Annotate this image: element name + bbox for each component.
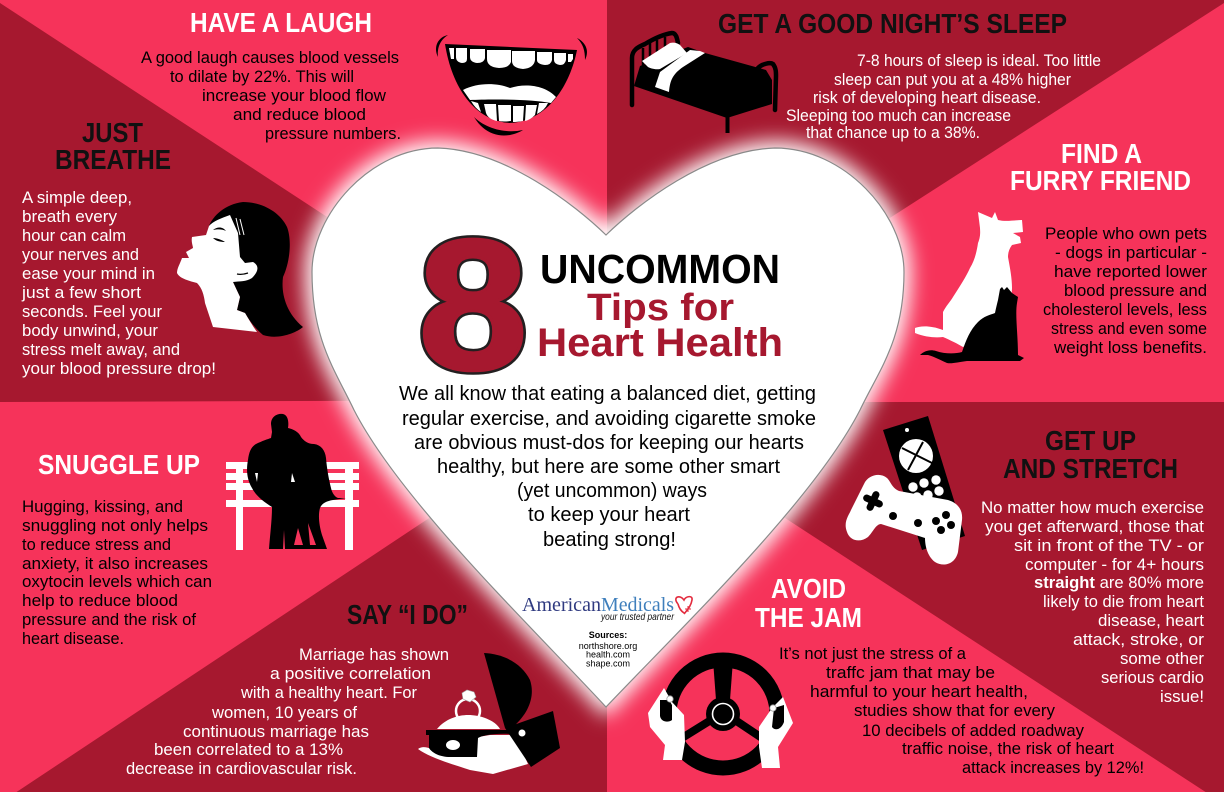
text: snuggle up: to reduce stress and [22,536,171,554]
text: avoid the jam: traffic noise, the risk of heart [902,740,1114,758]
text: snuggle up: anxiety, it also increases [22,555,208,573]
text: say i do: a positive correlation [270,665,431,683]
intro text: (yet uncommon) ways [517,480,707,502]
title [537,246,783,365]
text: sleep: risk of developing heart disease. [813,89,1041,107]
icon: steering wheel and hands [648,660,793,768]
heading: avoid the jam [755,573,862,633]
icon: remote and game controller [846,416,965,565]
intro text: regular exercise, and avoiding cigarette smoke [402,408,816,430]
text: snuggle up: pressure and the risk of [22,611,196,629]
heading: avoid the jam: AVOID [771,573,846,604]
text: just breathe [21,189,216,378]
heart glow [312,148,904,707]
text: just breathe: just a few short [21,284,141,302]
text: get up: likely to die from heart [1043,593,1204,611]
icon: laughing mouth [436,35,587,136]
text: snuggle up: snuggling not only helps [22,517,208,535]
heading: furry friend [1010,138,1191,196]
panel: good night's sleep [632,8,1101,142]
text: just breathe: your blood pressure drop! [22,360,216,378]
text: just breathe: hour can calm [22,227,126,245]
text: avoid the jam: harmful to your heart health, [810,683,1028,701]
text: furry friend: have reported lower [1054,263,1208,281]
text: sleep: Sleeping too much can increase [786,107,1011,125]
text: say i do [126,646,449,778]
text: avoid the jam: studies show that for every [854,702,1056,720]
text: say i do: decrease in cardiovascular risk. [126,760,357,778]
text: get up: disease, heart [1098,612,1204,630]
text: furry friend: stress and even some [1051,320,1207,338]
text: sleep: sleep can put you at a 48% higher [834,71,1071,89]
logo: American Medicals: Medicals [601,594,674,616]
text: snuggle up: help to reduce blood [22,592,178,610]
text: have a laugh: A good laugh causes blood vessels [141,49,399,67]
heading: just breathe [55,117,171,175]
text: say i do: continuous marriage has [183,723,369,741]
text: avoid the jam [779,645,1144,777]
text: avoid the jam: attack increases by 12%! [962,759,1144,777]
sources: Sources: [589,630,627,640]
text: have a laugh [141,49,401,143]
text: avoid the jam: It’s not just the stress of a [779,645,967,663]
text: furry friend: - dogs in particular - [1055,244,1207,262]
text: get up: serious cardio [1101,669,1204,687]
heading: avoid the jam: THE JAM [755,602,862,633]
text: furry friend: weight loss benefits. [1053,339,1207,357]
text: avoid the jam: 10 decibels of added roadway [862,722,1085,740]
heart [312,148,904,707]
big number 8: 8 [418,200,528,409]
heading: furry friend: FIND A [1061,138,1142,169]
text: just breathe: breath every [22,208,118,226]
text: snuggle up: heart disease. [22,630,124,648]
text: have a laugh: pressure numbers. [265,125,401,143]
sources [579,630,637,668]
text: say i do: with a healthy heart. For [240,684,417,702]
title: Tips for [587,287,734,329]
heading: get up: GET UP [1045,425,1136,456]
title: Heart Health [537,321,783,365]
text: just breathe: ease your mind in [22,265,155,283]
text: say i do: women, 10 years of [211,704,357,722]
sources: northshore.org [579,641,637,651]
text: just breathe: body unwind, your [22,322,159,340]
intro text: to keep your heart [528,504,690,526]
heading: say i do: SAY “I DO” [347,599,468,630]
icon: dog and cat [915,212,1024,363]
text: just breathe: seconds. Feel your [22,303,163,321]
text: get up: you get afterward, those that [985,518,1204,536]
heading: snuggle up: SNUGGLE UP [38,449,200,480]
intro text: beating strong! [543,529,676,551]
text: get up: straight are 80% more [1034,574,1204,592]
panel: have a laugh [141,7,587,143]
text: have a laugh: and reduce blood [233,106,366,124]
text: furry friend: blood pressure and [1064,282,1207,300]
text: get up: computer - for 4+ hours [1025,556,1204,574]
heading: sleep: GET A GOOD NIGHT’S SLEEP [718,8,1067,39]
heading: just breathe: BREATHE [55,144,171,175]
text: snuggle up: Hugging, kissing, and [22,498,183,516]
text: just breathe: your nerves and [22,246,139,264]
title: UNCOMMON [540,246,780,292]
icon: couple on a bench [226,414,359,550]
panel: just breathe [21,117,303,378]
intro text: healthy, but here are some other smart [437,456,780,478]
big number 8: 8 [418,200,528,409]
intro text: are obvious must-dos for keeping our hearts [414,432,804,454]
panel: say i do [126,599,560,778]
text: get up [981,499,1205,706]
icon: bed [632,33,776,133]
text: sleep [786,52,1101,142]
logo: American Medicals: American [522,594,601,616]
panel: furry friend [915,138,1208,363]
logo: American Medicals: your trusted partner [600,612,675,623]
text: just breathe: stress melt away, and [22,341,180,359]
text: sleep: 7-8 hours of sleep is ideal. Too little [857,52,1101,70]
text: have a laugh: to dilate by 22%. This will [170,68,354,86]
text: get up: some other [1120,650,1205,668]
intro text: We all know that eating a balanced diet, getting [399,383,816,405]
text: snuggle up: oxytocin levels which can [22,573,212,591]
text: have a laugh: increase your blood flow [202,87,386,105]
panel: get up and stretch [846,416,1205,706]
icon: ring on a platter [418,653,560,774]
text: say i do: Marriage has shown [299,646,449,664]
text: furry friend: People who own pets [1045,225,1207,243]
heading: just breathe: JUST [82,117,143,148]
heading: get up [1003,425,1178,484]
intro text [399,383,816,551]
logo: American Medicals [522,594,692,623]
text: sleep: that chance up to a 38%. [806,124,980,142]
text: say i do: been correlated to a 13% [154,741,343,759]
text: furry friend: cholesterol levels, less [1043,301,1207,319]
sources: health.com [586,650,630,660]
text: furry friend [1043,225,1208,357]
panel: avoid the jam [648,573,1144,777]
heading: get up: AND STRETCH [1003,453,1178,484]
heading: furry friend: FURRY FRIEND [1010,165,1191,196]
text: get up: attack, stroke, or [1073,631,1205,649]
text: just breathe: A simple deep, [22,189,132,207]
text: avoid the jam: traffc jam that may be [826,664,995,682]
sources: shape.com [586,658,630,668]
heading: have a laugh: HAVE A LAUGH [190,7,372,38]
text: get up: No matter how much exercise [981,499,1204,517]
text: snuggle up [22,498,212,648]
panel: snuggle up [22,414,359,648]
text: get up: sit in front of the TV - or [1014,537,1205,555]
icon: woman breathing [177,202,303,337]
text: get up: issue! [1160,688,1204,706]
